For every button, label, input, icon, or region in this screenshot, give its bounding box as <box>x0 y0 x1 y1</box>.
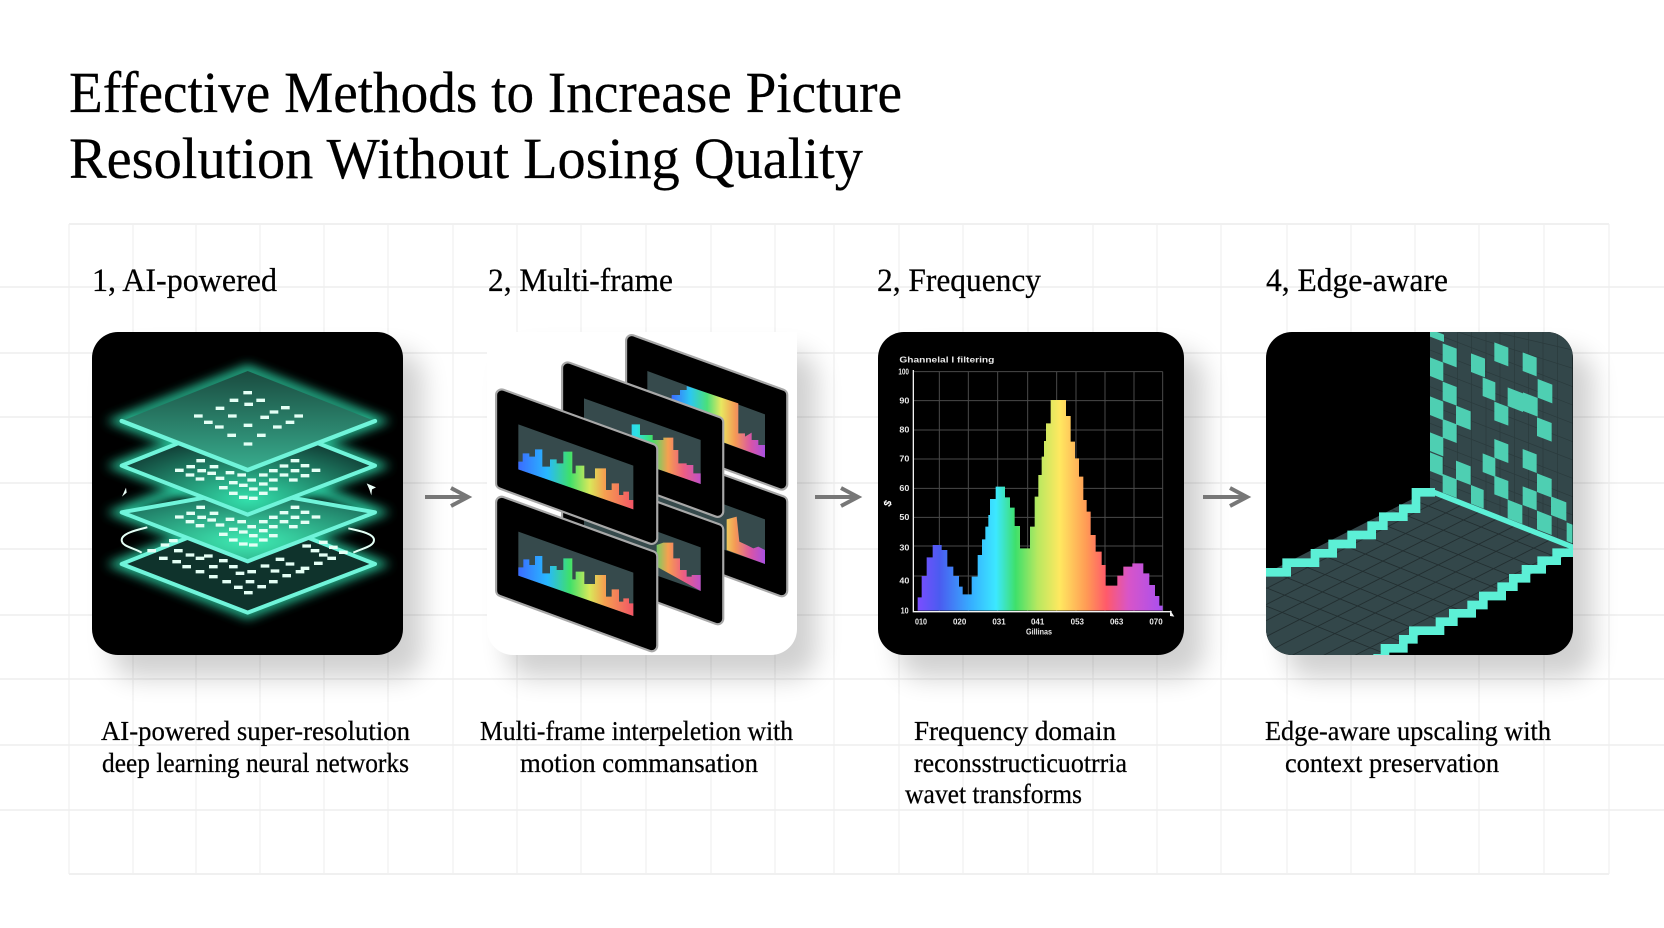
y axis labels: 80 <box>899 426 910 435</box>
x axis labels: Gillinas <box>1026 627 1053 636</box>
description: Multi-frame: Multi-frame interpeletion with <box>480 716 793 746</box>
chart title: Ghannelal I filtering <box>899 356 994 365</box>
description: AI-powered: deep learning neural networks <box>102 748 409 778</box>
description: Edge-aware <box>1265 716 1551 778</box>
histogram bars <box>918 400 1163 611</box>
frame: middle upper <box>568 368 718 511</box>
x axis labels: 041 <box>1031 617 1045 626</box>
y axis labels: 70 <box>899 455 910 464</box>
description: Frequency: reconsstructicuotrria <box>914 748 1127 778</box>
y axis symbol: $ <box>882 499 895 508</box>
panel: edge-aware isometric pixels <box>1266 332 1604 689</box>
title: Effective Methods to Increase Picture <box>69 60 902 125</box>
panel: AI-powered neural network layers <box>92 332 423 678</box>
y axis labels: 40 <box>899 576 910 585</box>
x axis labels <box>915 618 1162 634</box>
x axis labels: 070 <box>1149 617 1163 626</box>
wall with teal tiles <box>1430 329 1573 550</box>
step heading: 4, Edge-aware: 4, Edge-aware <box>1266 263 1448 299</box>
icon: bottom layer <box>122 514 375 613</box>
arrow 3 <box>1203 488 1247 506</box>
icon: sparkles <box>122 483 376 497</box>
y axis labels: 90 <box>899 396 910 405</box>
frame: back upper <box>632 341 782 484</box>
title: Resolution Without Losing Quality <box>69 126 863 191</box>
icon: second layer <box>120 443 377 517</box>
arrow 1 <box>425 488 468 506</box>
arrow 2 <box>815 488 858 506</box>
frame: front lower <box>502 502 652 646</box>
icon: top layer <box>122 371 375 470</box>
y axis labels: 30 <box>899 544 910 553</box>
y axis labels: 10 <box>901 606 909 615</box>
description: Frequency <box>905 716 1127 809</box>
x axis labels: 053 <box>1071 617 1085 626</box>
panel: frequency spectrum chart <box>878 332 1204 678</box>
y axis labels: 50 <box>899 513 910 522</box>
frame: front upper <box>502 395 652 538</box>
description: Edge-aware: Edge-aware upscaling with <box>1265 716 1551 746</box>
chart axes <box>913 370 1172 612</box>
description: AI-powered <box>101 716 410 778</box>
cyan stepped edges <box>1263 491 1573 658</box>
floor <box>1266 496 1569 655</box>
title <box>69 60 902 191</box>
frame: back lower <box>632 447 782 591</box>
y axis labels: 60 <box>899 484 910 493</box>
x axis labels: 063 <box>1110 617 1124 626</box>
x axis labels: 010 <box>915 617 927 626</box>
description: AI-powered: AI-powered super-resolution <box>101 716 410 746</box>
icon: third layer <box>122 490 375 561</box>
x axis labels: 020 <box>953 617 967 626</box>
step heading: 1, AI-powered: 1, AI-powered <box>92 263 277 299</box>
y axis labels: 100 <box>898 367 909 376</box>
frame: middle lower <box>568 475 718 619</box>
description: Edge-aware: context preservation <box>1285 748 1499 778</box>
step heading: 2, Frequency: 2, Frequency <box>877 263 1041 299</box>
description: Frequency: Frequency domain <box>914 716 1116 746</box>
step heading: 2, Multi-frame: 2, Multi-frame <box>488 263 673 299</box>
background grid <box>0 224 1664 874</box>
y axis labels <box>898 368 909 614</box>
description: Frequency: wavet transforms <box>905 779 1082 809</box>
description: Multi-frame <box>480 716 793 778</box>
x axis labels: 031 <box>992 617 1006 626</box>
description: Multi-frame: motion commansation <box>520 748 758 778</box>
panel: multi-frame stacked images <box>487 332 817 678</box>
